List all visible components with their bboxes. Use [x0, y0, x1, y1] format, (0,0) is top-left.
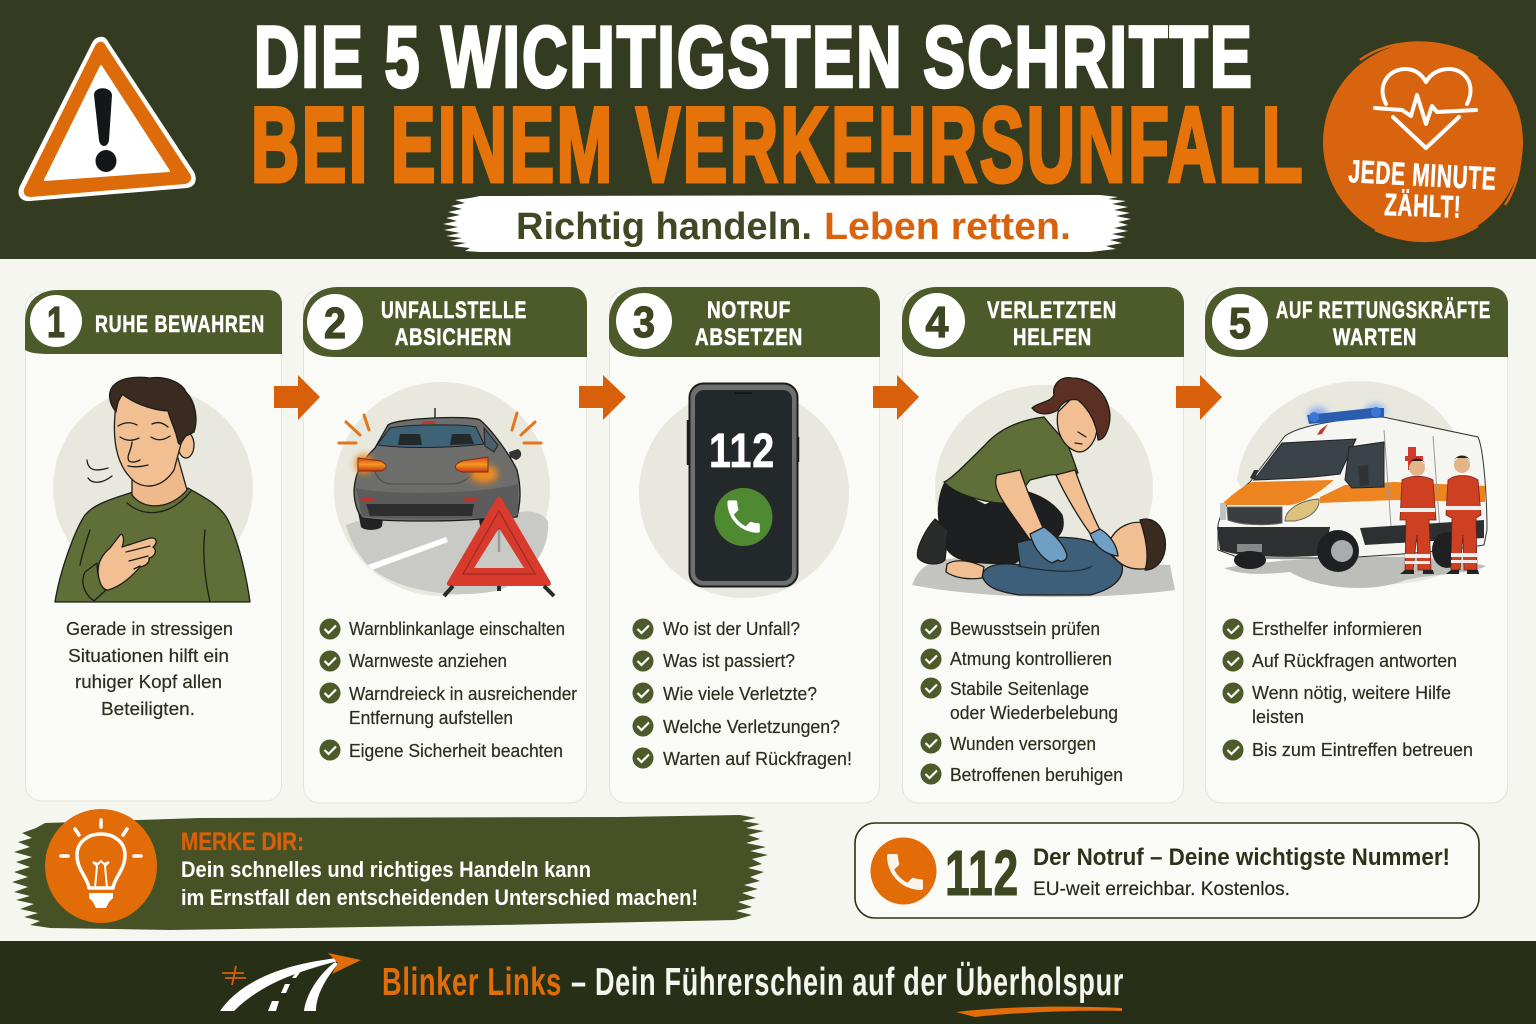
checklist: step 4: Bewusstsein prüfen — [950, 618, 1100, 639]
callout: merke dir: Dein schnelles und richtiges Handeln kann — [181, 857, 591, 882]
paramedic right — [1446, 456, 1481, 574]
checklist: step 3 — [632, 618, 852, 769]
heading: step 2: UNFALLSTELLE — [381, 297, 527, 324]
checklist: step 2: Warnblinkanlage einschalten — [349, 618, 565, 639]
checklist: step 4: oder Wiederbelebung — [950, 702, 1118, 723]
heading: step 2: ABSICHERN — [395, 324, 512, 351]
heading: step 4 — [902, 287, 1184, 357]
arrow: step 4 to 5 — [1176, 375, 1222, 420]
panel: step 4 verletzten helfen — [902, 287, 1184, 803]
checklist: step 4: Stabile Seitenlage — [950, 678, 1089, 699]
checklist: step 5: Bis zum Eintreffen betreuen — [1252, 739, 1473, 760]
text: step 1 description: ruhiger Kopf allen — [75, 671, 222, 692]
heading: step 4: VERLETZTEN — [987, 297, 1117, 324]
header banner — [0, 0, 1536, 259]
checklist: step 4 — [920, 618, 1123, 785]
arrow: step 3 to 4 — [873, 375, 919, 420]
checklist: step 5: Ersthelfer informieren — [1252, 618, 1422, 639]
arrow: step 1 to 2 — [274, 375, 320, 420]
heading: step 5: 5 — [1229, 299, 1251, 348]
icon: warning triangle — [18, 37, 196, 201]
callout: notruf 112: EU-weit erreichbar. Kostenlos. — [1033, 879, 1290, 900]
callout: notruf 112: 112 — [945, 837, 1019, 909]
text: step 1 description: Gerade in stressigen — [66, 618, 233, 639]
subtitle brush band: Leben retten. — [824, 206, 1071, 248]
illustration: calm person breathing — [53, 377, 253, 602]
heading: step 4: 4 — [926, 298, 949, 347]
checklist: step 5: Auf Rückfragen antworten — [1252, 650, 1457, 671]
checklist: step 3: Wo ist der Unfall? — [663, 618, 800, 639]
callout: merke dir — [12, 809, 768, 930]
heading: step 5: WARTEN — [1333, 324, 1417, 351]
heading: step 2 — [303, 287, 587, 357]
icon: light bulb — [45, 809, 157, 923]
heading: step 3: ABSETZEN — [695, 324, 803, 351]
footer: – Dein Führerschein auf der Überholspur — [571, 961, 1124, 1004]
subtitle brush band — [443, 195, 1131, 252]
heading: step 4: HELFEN — [1013, 324, 1092, 351]
illustration: ambulance and paramedics — [1217, 381, 1487, 588]
checklist: step 4: Betroffenen beruhigen — [950, 764, 1123, 785]
heading: step 3 — [609, 287, 880, 357]
heading: step 1 — [25, 290, 282, 354]
checklist: step 2: Warnweste anziehen — [349, 650, 507, 671]
text: step 1 description — [66, 618, 233, 719]
checklist: step 3: Warten auf Rückfragen! — [663, 748, 852, 769]
checklist: step 3: Welche Verletzungen? — [663, 716, 840, 737]
checklist: step 5: leisten — [1252, 706, 1304, 727]
panel: step 5 auf rettungskräfte warten — [1205, 287, 1508, 803]
heading: step 3: NOTRUF — [707, 297, 791, 324]
illustration: phone dialing 112: 112 — [709, 425, 775, 478]
checklist: step 2: Warndreieck in ausreichender — [349, 683, 577, 704]
icon: heart with pulse — [1375, 69, 1476, 148]
panel: step 1 ruhe bewahren — [25, 290, 282, 801]
heading: step 1: RUHE BEWAHREN — [95, 311, 265, 338]
heading: step 3: 3 — [633, 298, 655, 347]
underline brush — [956, 1007, 1122, 1017]
arrow: step 2 to 3 — [579, 375, 626, 420]
paramedic left — [1400, 458, 1436, 574]
text: step 1 description: Beteiligten. — [101, 698, 195, 719]
footer — [0, 941, 1536, 1024]
heading: step 2: 2 — [324, 299, 346, 348]
checklist: step 4: Wunden versorgen — [950, 733, 1096, 754]
illustration: first aider helping patient — [912, 378, 1175, 597]
callout: notruf 112 — [855, 823, 1479, 918]
checklist: step 4: Atmung kontrollieren — [950, 648, 1112, 669]
illustration: car with warning triangle — [334, 382, 554, 596]
panel: step 3 notruf absetzen — [609, 287, 880, 803]
callout: merke dir: MERKE DIR: — [181, 828, 304, 856]
callout: notruf 112: Der Notruf – Deine wichtigste Nummer! — [1033, 844, 1450, 871]
checklist: step 5: Wenn nötig, weitere Hilfe — [1252, 682, 1451, 703]
illustration: phone dialing 112 — [639, 384, 849, 598]
subtitle brush band: Richtig handeln. — [516, 206, 812, 248]
checklist: step 2: Entfernung aufstellen — [349, 707, 513, 728]
checklist: step 5 — [1222, 618, 1473, 760]
checklist: step 3: Was ist passiert? — [663, 650, 795, 671]
footer: Blinker Links — [382, 961, 562, 1004]
icon: road logo with arrow — [220, 953, 361, 1011]
panel: step 2 unfallstelle absichern — [303, 287, 587, 803]
text: step 1 description: Situationen hilft ein — [68, 645, 229, 666]
heading: step 5 — [1205, 287, 1508, 357]
heading: step 1: 1 — [47, 298, 65, 347]
badge: jede minute zählt: ZÄHLT! — [1384, 187, 1462, 225]
checklist: step 2 — [320, 618, 577, 761]
badge: jede minute zählt — [1323, 42, 1523, 242]
callout: merke dir: im Ernstfall den entscheidenden Unterschied machen! — [181, 885, 698, 910]
checklist: step 2: Eigene Sicherheit beachten — [349, 740, 563, 761]
checklist: step 3: Wie viele Verletzte? — [663, 683, 817, 704]
icon: phone circle — [870, 838, 936, 904]
title — [251, 10, 1305, 204]
